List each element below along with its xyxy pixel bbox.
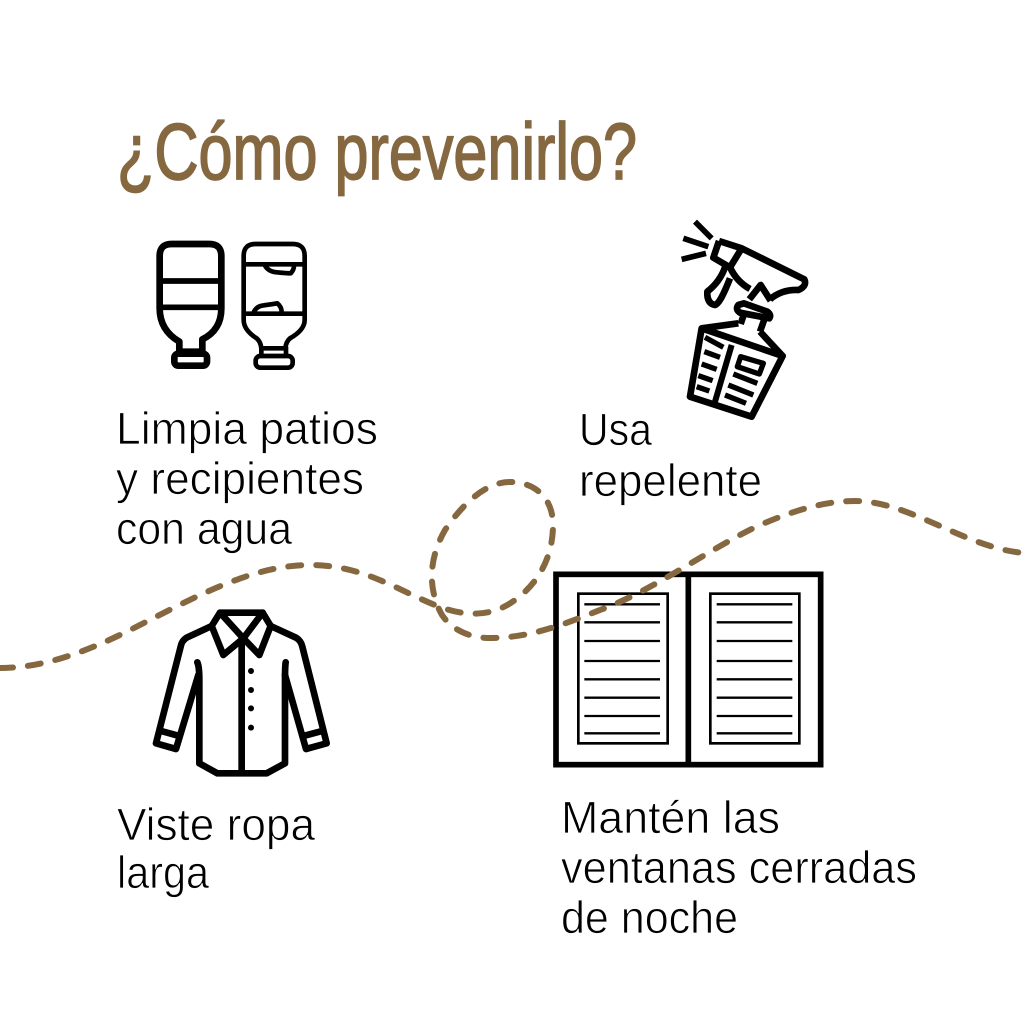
text: repellent: Usa bbox=[579, 404, 653, 455]
panel: repellent bbox=[579, 222, 805, 506]
text: long clothes: larga bbox=[117, 847, 210, 898]
panel: long clothes bbox=[117, 613, 327, 898]
text: long clothes: Viste ropa bbox=[117, 799, 316, 850]
text: long clothes bbox=[117, 799, 316, 898]
dashed mosquito flight path bbox=[0, 482, 1024, 668]
text: clean containers bbox=[116, 403, 378, 554]
icon: bottles bbox=[160, 244, 305, 368]
text: closed windows: ventanas cerradas bbox=[561, 842, 917, 893]
icon: shirt bbox=[156, 613, 327, 773]
text: clean containers: y recipientes bbox=[116, 453, 364, 504]
icon: spray bottle bbox=[682, 222, 805, 417]
text: closed windows: Mantén las bbox=[561, 792, 780, 843]
text: clean containers: con agua bbox=[116, 503, 293, 554]
title: ¿Cómo prevenirlo? bbox=[117, 107, 637, 196]
panel: clean containers bbox=[116, 244, 378, 554]
text: repellent bbox=[579, 404, 762, 506]
panel: closed windows bbox=[556, 574, 917, 943]
text: closed windows bbox=[561, 792, 917, 943]
text: repellent: repelente bbox=[579, 455, 762, 506]
text: clean containers: Limpia patios bbox=[116, 403, 378, 454]
text: closed windows: de noche bbox=[561, 892, 738, 943]
icon: window bbox=[556, 574, 821, 765]
